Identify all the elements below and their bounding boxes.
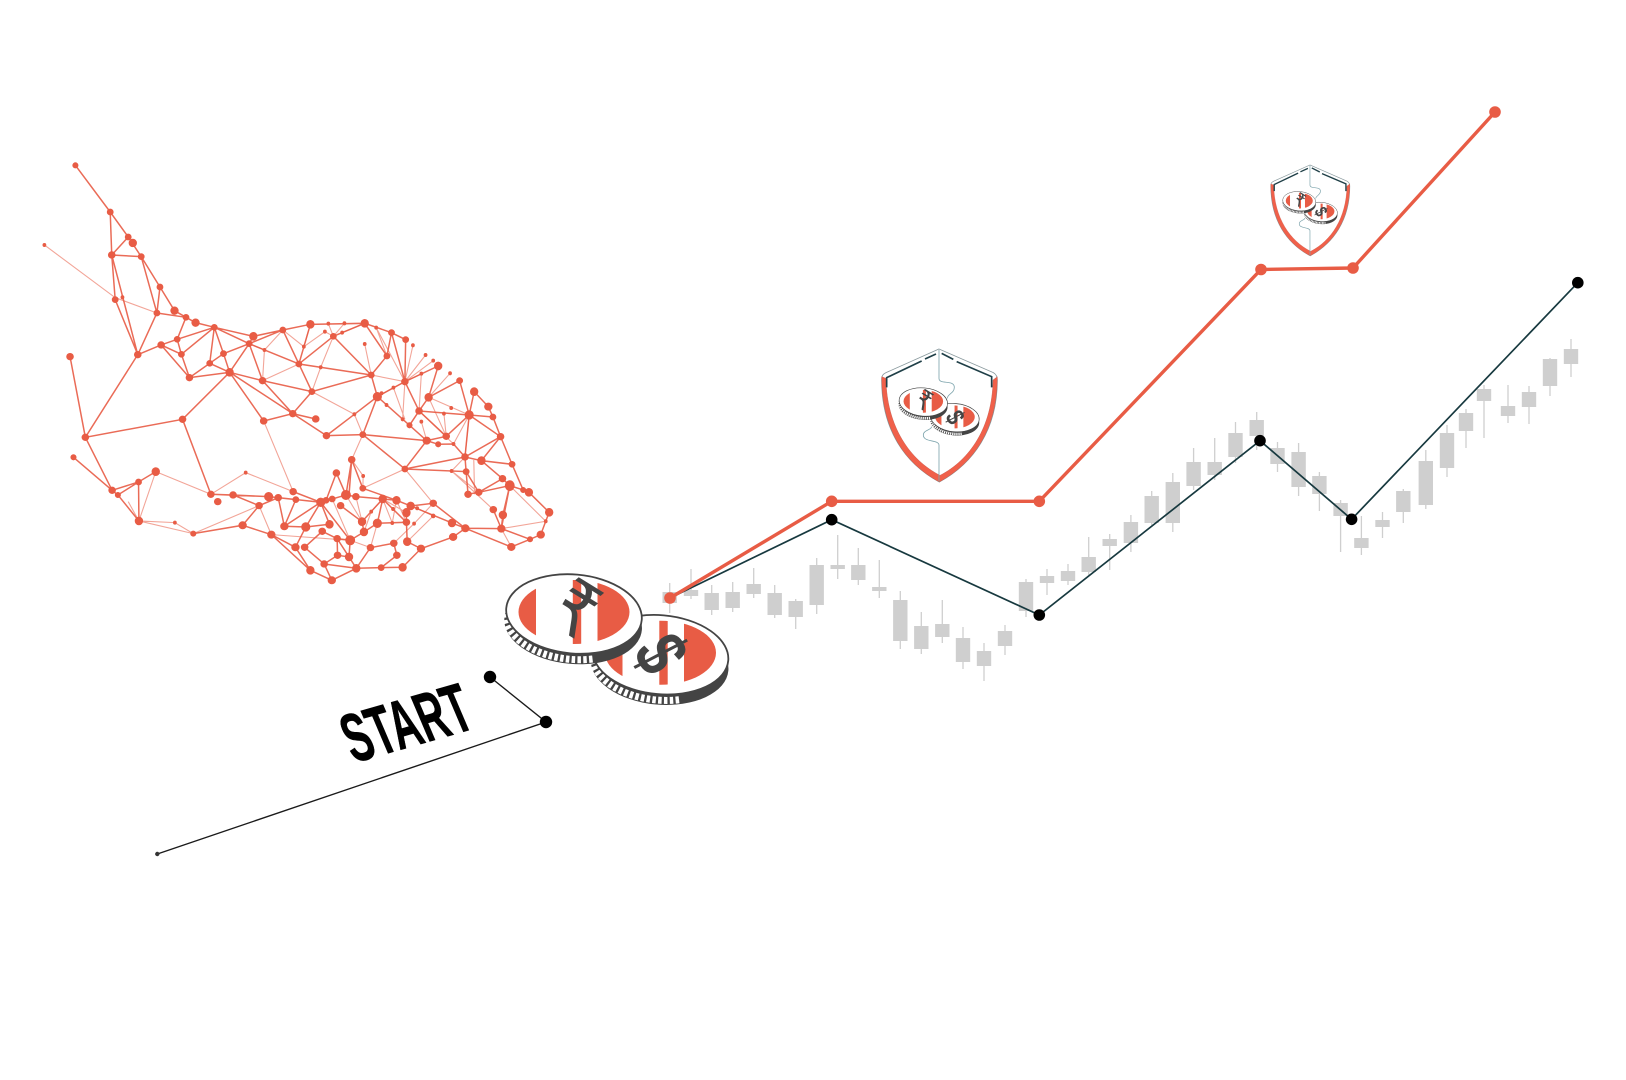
icon: dollar coin: $: [617, 621, 706, 686]
icon: dollar coin: [591, 614, 730, 705]
icon: large shield with puzzle seam and coins: ₹: [911, 384, 937, 418]
dark price line with black points: [670, 277, 1584, 621]
icon: large shield with puzzle seam and coins: $: [939, 406, 971, 429]
icon: small shield with puzzle seam and coins: ₹: [1291, 189, 1309, 212]
start baseline and pointer: [155, 671, 552, 856]
icon: small shield with puzzle seam and coins: [1271, 165, 1350, 256]
icon: small shield with puzzle seam and coins: $: [1310, 204, 1331, 220]
icon: large shield with puzzle seam and coins: [882, 349, 997, 482]
network map of connected nodes: [43, 163, 553, 584]
start label: START: [329, 669, 484, 777]
icon: rupee coin: ₹: [539, 561, 614, 657]
orange protected growth line with points: [664, 106, 1501, 604]
icon: rupee coin: [504, 573, 643, 664]
candlestick chart: [662, 339, 1578, 681]
